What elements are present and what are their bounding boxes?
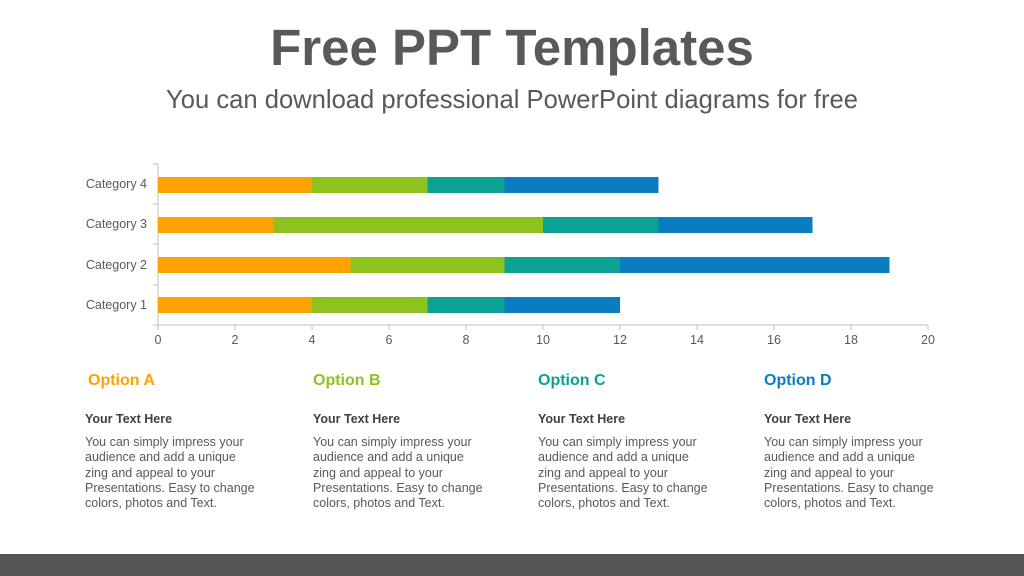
bar chart: Category 1 [86, 298, 147, 312]
bars: category 3 [158, 217, 812, 233]
bar chart: Category 2 [86, 258, 147, 272]
bar chart: 14 [690, 333, 704, 347]
panel: option B: Your Text Here [313, 412, 400, 426]
subtitle: You can download professional PowerPoint diagrams for free [166, 86, 858, 114]
bar chart: 0 [155, 333, 162, 347]
bar chart: Category 4 [86, 177, 147, 191]
panel: option B [313, 372, 483, 510]
panel: option D: Your Text Here [764, 412, 851, 426]
bars: category 1 [158, 297, 620, 313]
panel: option C [538, 372, 708, 510]
panel: option D: Option D [764, 372, 832, 389]
bar chart [86, 164, 935, 347]
footer bar [0, 554, 1024, 576]
bars: category 2 [158, 257, 890, 273]
panel: option A [85, 372, 255, 510]
panel: option B: Option B [313, 372, 381, 389]
bars: category 4 [158, 177, 658, 193]
bar chart: Category 3 [86, 217, 147, 231]
panel: option B: You can simply impress your audience and add a unique zing and appeal to your Presentations. Easy to change colors, photos and Text. [313, 435, 483, 510]
panel: option A: You can simply impress your audience and add a unique zing and appeal to your Presentations. Easy to change colors, photos and Text. [85, 435, 255, 510]
panel: option A: Option A [88, 372, 155, 389]
panel: option C: Your Text Here [538, 412, 625, 426]
bar chart: 10 [536, 333, 550, 347]
panel: option D: You can simply impress your audience and add a unique zing and appeal to your Presentations. Easy to change colors, photos and Text. [764, 435, 934, 510]
bar chart: 8 [463, 333, 470, 347]
panel: option C: Option C [538, 372, 606, 389]
title: Free PPT Templates [270, 19, 754, 76]
panel: option C: You can simply impress your audience and add a unique zing and appeal to your Presentations. Easy to change colors, photos and Text. [538, 435, 708, 510]
bar chart: 18 [844, 333, 858, 347]
bar chart: 4 [309, 333, 316, 347]
bar chart: 20 [921, 333, 935, 347]
bar chart: 6 [386, 333, 393, 347]
bar chart: 2 [232, 333, 239, 347]
bar chart: 12 [613, 333, 627, 347]
panel: option D [764, 372, 934, 510]
bar chart: 16 [767, 333, 781, 347]
panel: option A: Your Text Here [85, 412, 172, 426]
